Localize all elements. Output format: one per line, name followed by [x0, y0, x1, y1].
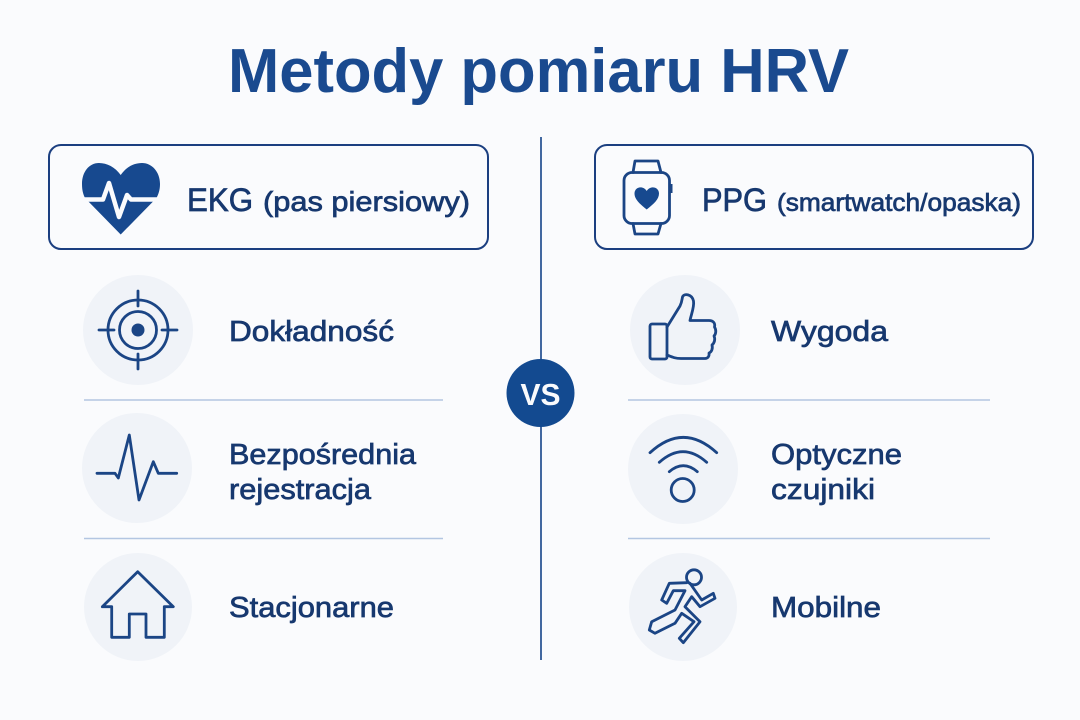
icon: running person [649, 570, 715, 643]
label: Wygoda: Wygoda [771, 316, 889, 348]
row: Bezpośrednia rejestracja [82, 413, 417, 523]
VS badge: VS [520, 377, 560, 412]
EKG header box [49, 145, 488, 249]
EKG heading: (pas piersiowy) [263, 186, 470, 217]
label: Bezpośrednia rejestracja: Bezpośrednia [229, 439, 417, 471]
row: Wygoda [630, 275, 889, 385]
EKG heading: EKG [187, 182, 253, 218]
icon: thumbs up [650, 295, 716, 359]
icon: house [102, 572, 173, 637]
PPG heading: PPG [702, 182, 767, 218]
label: Optyczne czujniki: czujniki [771, 474, 875, 506]
label: Bezpośrednia rejestracja: rejestracja [229, 474, 372, 506]
label: Mobilne: Mobilne [771, 592, 881, 624]
title: Metody pomiaru HRV [228, 37, 849, 106]
PPG heading: (smartwatch/opaska) [777, 189, 1021, 217]
label: Optyczne czujniki: Optyczne [771, 439, 902, 471]
VS badge [506, 359, 574, 427]
icon: heart with ECG trace [78, 163, 164, 234]
icon: optical sensor waves [650, 437, 717, 502]
icon: pulse line [97, 435, 177, 500]
center divider line [540, 137, 542, 660]
icon: target [99, 291, 177, 369]
panel: EKG [49, 145, 488, 661]
row: Stacjonarne [84, 553, 394, 661]
row: Dokładność [83, 275, 394, 385]
label: Stacjonarne: Stacjonarne [229, 592, 394, 624]
PPG header box [595, 145, 1033, 249]
icon: smartwatch with heart [624, 161, 672, 234]
row: Mobilne [629, 553, 881, 661]
row: Optyczne czujniki [628, 414, 902, 524]
label: Dokładność: Dokładność [229, 316, 394, 348]
panel: PPG [595, 145, 1033, 661]
